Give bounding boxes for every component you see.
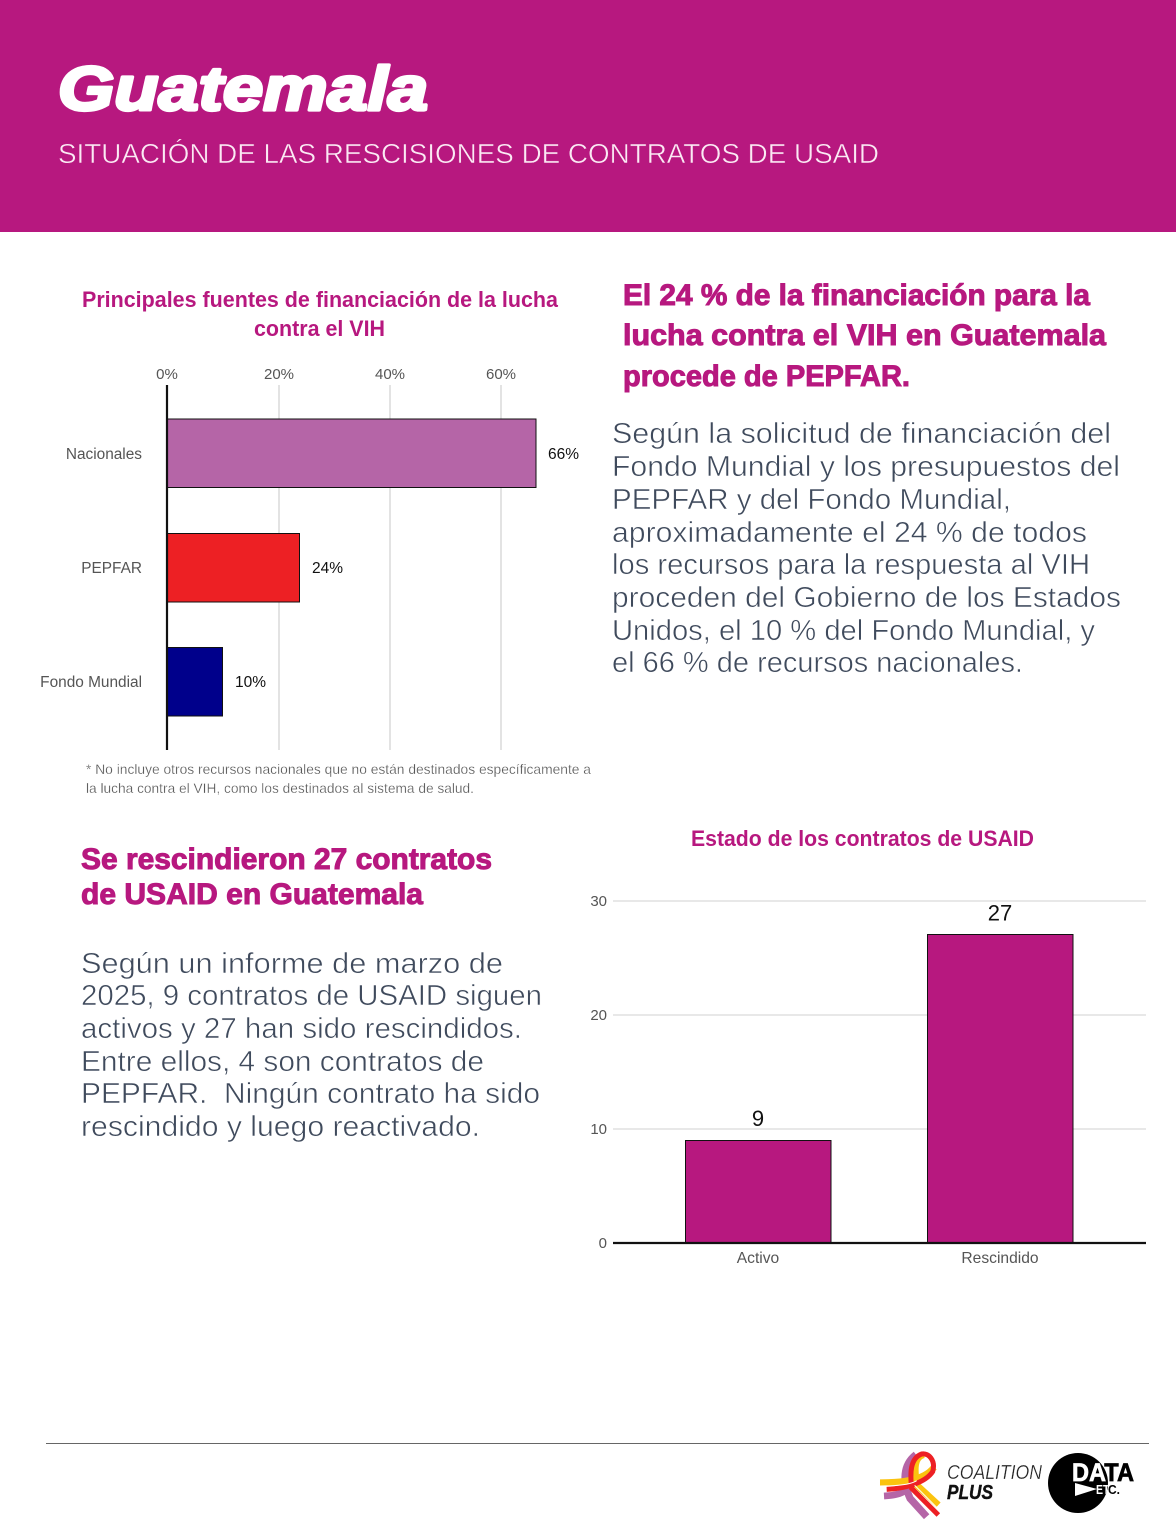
horizontal bar chart: 60% <box>486 366 516 383</box>
column chart: 27 <box>988 900 1012 926</box>
logo: Coalition Plus <box>880 1454 1042 1517</box>
column chart: 10 <box>590 1121 607 1138</box>
title: Guatemala <box>58 55 428 124</box>
panel: funding sources chart <box>40 287 591 796</box>
text block: funding explanation: Fondo Mundial y los presupuestos del <box>612 451 1120 483</box>
text block: funding explanation: el 66 % de recursos nacionales. <box>612 647 1023 679</box>
text block: funding explanation <box>612 418 1121 679</box>
horizontal bar chart <box>40 366 579 750</box>
horizontal bar chart: Fondo Mundial <box>40 674 142 691</box>
horizontal bar chart: Nacionales <box>66 446 142 463</box>
logo: Data Etc <box>1048 1453 1134 1513</box>
horizontal bar chart: 24% <box>312 560 343 577</box>
text block: contracts explanation: activos y 27 han sido rescindidos. <box>81 1013 522 1045</box>
horizontal bar chart: 40% <box>375 366 405 383</box>
text block: contracts explanation: PEPFAR. Ningún contrato ha sido <box>81 1078 540 1110</box>
text block: contracts explanation: rescindido y luego reactivado. <box>81 1111 480 1143</box>
chart title: Estado de los contratos de USAID <box>691 826 1034 851</box>
horizontal bar chart: 20% <box>264 366 294 383</box>
heading: 24 percent PEPFAR: lucha contra el VIH en Guatemala <box>623 319 1106 352</box>
header banner <box>0 0 1176 232</box>
column chart <box>590 893 1146 1267</box>
text block: funding explanation: Según la solicitud de financiación del <box>612 418 1111 450</box>
heading: 27 contracts rescinded: de USAID en Guatemala <box>81 878 423 911</box>
horizontal bar chart: 10% <box>235 674 266 691</box>
text block: funding explanation: Unidos, el 10 % del Fondo Mundial, y <box>612 615 1095 647</box>
column chart: 20 <box>590 1007 607 1024</box>
chart title: Principales fuentes de financiación de la lucha <box>82 287 559 312</box>
horizontal bar chart: 0% <box>156 366 178 383</box>
logo: Data Etc: C. <box>1108 1482 1120 1497</box>
heading: 24 percent PEPFAR: procede de PEPFAR. <box>623 360 910 393</box>
column chart: 9 <box>752 1106 764 1131</box>
wordmark: COALITION <box>947 1462 1042 1484</box>
heading: 27 contracts rescinded <box>81 843 492 911</box>
subtitle: SITUACIÓN DE LAS RESCISIONES DE CONTRATOS DE USAID <box>58 138 879 169</box>
text block: contracts explanation: Entre ellos, 4 son contratos de <box>81 1046 484 1078</box>
footnote <box>86 761 591 796</box>
footnote: * No incluye otros recursos nacionales que no están destinados específicamente a <box>86 761 591 777</box>
heading: 24 percent PEPFAR <box>623 279 1106 393</box>
heading: 27 contracts rescinded: Se rescindieron 27 contratos <box>81 843 492 876</box>
text block: contracts explanation <box>81 948 542 1143</box>
text block: funding explanation: los recursos para la respuesta al VIH <box>612 549 1090 581</box>
column chart: Rescindido <box>961 1250 1039 1267</box>
column chart: 0 <box>599 1235 607 1252</box>
text block: funding explanation: PEPFAR y del Fondo Mundial, <box>612 484 1011 516</box>
logo: Coalition Plus: PLUS <box>947 1482 994 1504</box>
heading: 24 percent PEPFAR: El 24 % de la financiación para la <box>623 279 1090 312</box>
chart title: contra el VIH <box>254 316 385 341</box>
text block: funding explanation: proceden del Gobierno de los Estados <box>612 582 1121 614</box>
text block: contracts explanation: 2025, 9 contratos de USAID siguen <box>81 980 542 1012</box>
horizontal bar chart: PEPFAR <box>81 560 142 577</box>
logo: Data Etc: DATA <box>1072 1459 1134 1487</box>
text block: funding explanation: aproximadamente el 24 % de todos <box>612 517 1087 549</box>
logo: Data Etc: DATA <box>1072 1459 1134 1487</box>
logo: Data Etc: ETC. <box>1096 1482 1120 1497</box>
icon: ribbon <box>880 1454 941 1517</box>
column chart: Activo <box>737 1250 780 1267</box>
panel: USAID contracts chart <box>590 826 1146 1267</box>
footnote: la lucha contra el VIH, como los destinados al sistema de salud. <box>86 780 474 796</box>
column chart: 30 <box>590 893 607 910</box>
horizontal bar chart: 66% <box>548 446 579 463</box>
text block: contracts explanation: Según un informe de marzo de <box>81 948 503 980</box>
chart title <box>82 287 559 341</box>
